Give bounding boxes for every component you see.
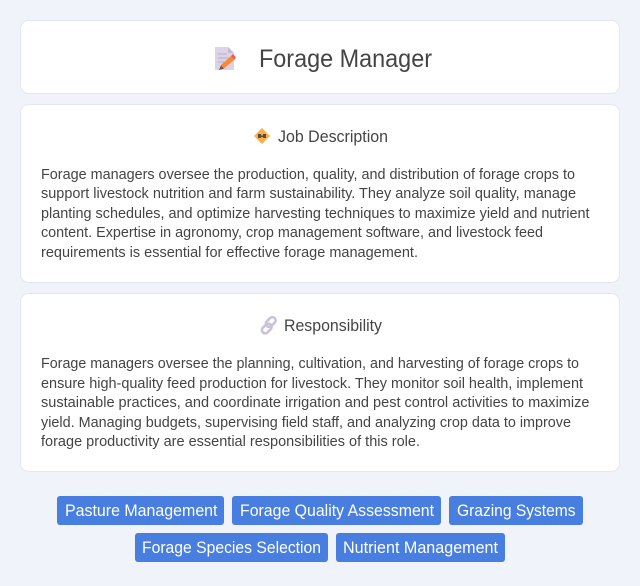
icon: document with pencil [215,47,236,70]
tag: grazing systems: Grazing Systems [457,502,576,520]
tag: pasture management [57,496,224,525]
text block: responsibility [41,356,590,450]
text block: responsibility: sustainable practices, and coordinate irrigation and pest control activities to maximize [41,395,590,411]
tag: forage quality assessment: Forage Quality Assessment [240,502,434,520]
text block: responsibility: Forage managers oversee the planning, cultivation, and harvesting of forage crops to [41,356,579,372]
text block: job description: planting schedules, and optimize harvesting techniques to maximize yield and nutrient [41,206,590,222]
tags: skills [57,496,583,562]
text block: job description: content. Expertise in agronomy, crop management software, and livestock feed [41,225,543,241]
text block: responsibility: forage productivity are essential responsibilities of this role. [41,434,420,450]
heading: responsibility: Responsibility [284,316,383,335]
icon: chain link [261,316,277,335]
tag: forage quality assessment [232,496,441,525]
tag: forage species selection: Forage Species Selection [142,539,321,557]
icon: orange diamond [254,128,270,144]
text block: responsibility: yield. Managing budgets, supervising field staff, and analyzing crop data to improve [41,415,571,431]
tag: nutrient management [336,533,505,562]
tag: nutrient management: Nutrient Management [343,539,498,557]
text block: job description [41,167,590,261]
tag: pasture management: Pasture Management [65,502,218,520]
text block: responsibility: ensure high-quality feed production for livestock. They monitor soil health, implement [41,376,583,392]
text block: job description: support livestock nutrition and farm sustainability. They analyze soil quality, manage [41,186,576,202]
panel: job description [20,104,620,282]
text block: job description: Forage managers oversee the production, quality, and distribution of forage crops to [41,167,575,183]
heading: job description: Job Description [278,127,388,146]
text block: job description: requirements is essential for effective forage management. [41,245,418,261]
tag: grazing systems [449,496,583,525]
tag: forage species selection [135,533,328,562]
panel: responsibility [20,294,620,472]
title: Forage Manager [259,45,432,73]
panel: title card [20,20,620,94]
